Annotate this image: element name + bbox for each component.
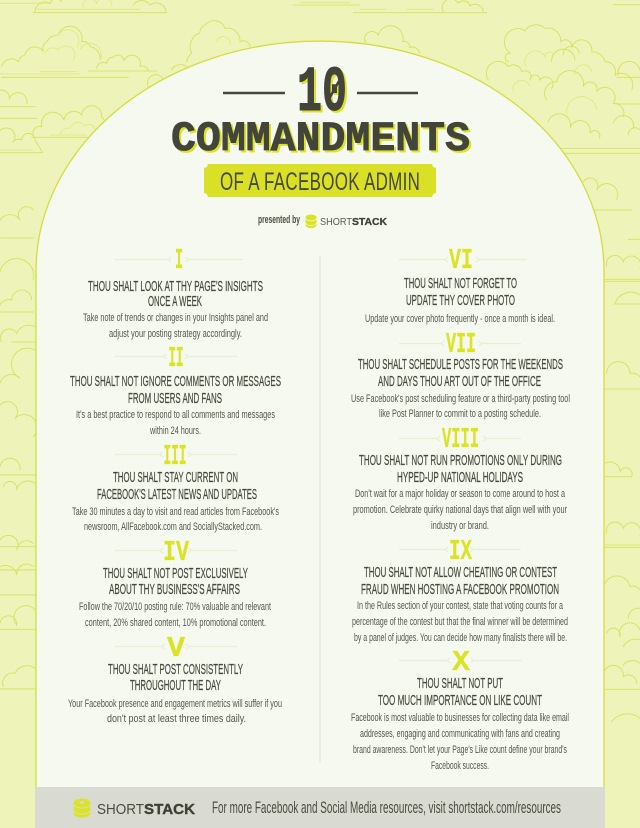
body IX (352, 600, 568, 644)
heading IV: THOU SHALT NOT POST EXCLUSIVELY (103, 565, 248, 582)
heading IV (103, 565, 248, 598)
heading I: ONCE A WEEK (148, 293, 202, 310)
body V: Your Facebook presence and engagement metrics will suffer if you (68, 698, 282, 710)
body I: Take note of trends or changes in your Insights panel and (83, 312, 268, 324)
heading VI: UPDATE THY COVER PHOTO (406, 292, 515, 309)
numeral IV: IV (163, 536, 189, 569)
heading V: THOU SHALT POST CONSISTENTLY (108, 661, 243, 678)
commandment VII (351, 328, 570, 420)
heading I: THOU SHALT LOOK AT THY PAGE'S INSIGHTS (88, 278, 263, 295)
body I: adjust your posting strategy accordingly. (109, 328, 242, 340)
body VII: like Post Planner to commit to a posting schedule. (379, 408, 541, 420)
heading VIII (359, 452, 562, 486)
body VIII (353, 488, 567, 532)
heading II: THOU SHALT NOT IGNORE COMMENTS OR MESSAGES (70, 373, 281, 390)
body IV: content, 20% shared content, 10% promotional content. (85, 617, 266, 629)
numeral V: V (167, 632, 186, 665)
heading III: FACEBOOK'S LATEST NEWS AND UPDATES (97, 486, 257, 503)
body VIII: industry or brand. (431, 520, 489, 532)
commandment I: I (175, 244, 183, 277)
body II: It's a best practice to respond to all comments and messages (76, 409, 275, 421)
body III: newsroom, AllFacebook.com and SociallyStacked.com. (84, 521, 262, 533)
body II (76, 409, 275, 437)
numeral VII: VII (446, 328, 476, 361)
body III: Take 30 minutes a day to visit and read articles from Facebook's (72, 506, 279, 518)
commandment II (70, 342, 281, 437)
heading V (108, 661, 243, 694)
body I (83, 312, 268, 340)
footer logo wordmark: STACK (144, 801, 195, 818)
presented by ShortStack (258, 214, 388, 228)
heading VII (358, 356, 563, 390)
commandment V (68, 632, 282, 725)
footer logo wordmark: SHORT (97, 801, 144, 818)
heading IV: ABOUT THY BUSINESS'S AFFAIRS (109, 581, 240, 598)
heading II: FROM USERS AND FANS (128, 390, 222, 407)
body V: don't post at least three times daily. (107, 713, 246, 725)
subtitle badge: OF A FACEBOOK ADMIN (220, 168, 420, 196)
heading II (70, 373, 281, 407)
title: 10 (223, 58, 418, 132)
body IV (79, 601, 271, 629)
presented by ShortStack: SHORT (320, 217, 352, 228)
commandment III: III (164, 440, 186, 473)
numeral VIII: VIII (442, 423, 479, 456)
heading IX (361, 564, 559, 598)
commandment VIII (353, 423, 567, 532)
commandment II: II (168, 342, 184, 375)
icon: small stacked coins (305, 214, 317, 228)
heading III (97, 469, 257, 503)
commandment III (72, 440, 279, 533)
numeral X: X (452, 646, 471, 679)
commandment X (351, 646, 569, 772)
heading X: THOU SHALT NOT PUT (417, 675, 503, 692)
body X (351, 712, 569, 772)
commandment IV (79, 536, 271, 629)
numeral IX: IX (449, 535, 472, 568)
icon: stacked coins logo (73, 798, 91, 818)
body IV: Follow the 70/20/10 posting rule: 70% valuable and relevant (79, 601, 271, 613)
heading III: THOU SHALT STAY CURRENT ON (113, 469, 238, 486)
presented by ShortStack: presented by (258, 214, 301, 226)
footer logo wordmark (97, 801, 195, 818)
heading VIII: HYPED-UP NATIONAL HOLIDAYS (397, 469, 523, 486)
commandment VI (365, 244, 555, 325)
left margin (0, 118, 37, 689)
commandment I (83, 244, 268, 340)
body X: Facebook success. (431, 760, 489, 772)
body III (72, 506, 279, 533)
heading V: THROUGHOUT THE DAY (130, 677, 221, 694)
heading VI: THOU SHALT NOT FORGET TO (404, 275, 517, 292)
title: Commandments: COMMANDMENTS (171, 115, 470, 163)
numeral VI: VI (449, 244, 473, 277)
title: Commandments: COMMANDMENTS (173, 117, 472, 165)
body II: within 24 hours. (149, 425, 201, 437)
title: 10: 10 (299, 60, 349, 132)
commandment IX (352, 535, 568, 644)
title: 10: 10 (297, 58, 347, 130)
body VII (351, 393, 570, 420)
footer band (35, 787, 605, 828)
heading I (88, 278, 263, 310)
heading VI (404, 275, 517, 309)
heading X (378, 675, 542, 709)
presented by ShortStack: STACK (352, 217, 388, 228)
body V (68, 698, 282, 725)
